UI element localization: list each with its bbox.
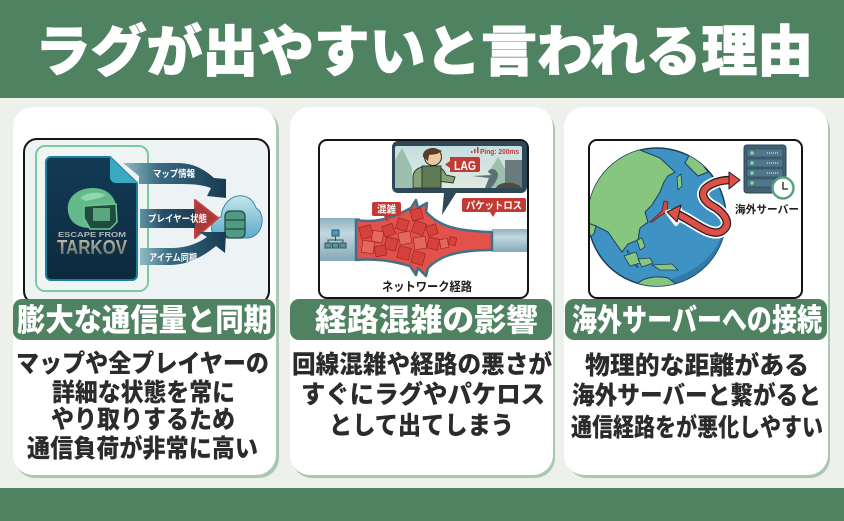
ping readout: Ping: 200ms [480,147,519,156]
tag: packet loss: パケットロス [466,200,522,212]
tag: congestion: 混雑 [377,203,396,216]
pipe left [320,218,360,261]
illustration: congested network pipe [290,140,552,440]
header band [0,0,844,98]
title: ラグが出やすいと言われる理由 [35,21,813,83]
arrow: player state [140,200,218,238]
icon: Japan [650,201,668,222]
icon: soldier [413,148,455,188]
illustration: game data flowing to cloud [24,139,269,304]
heading: route congestion: 経路混雑の影響 [315,303,538,338]
LAG tag: LAG [454,159,476,173]
enemy silhouette [472,169,498,188]
arrow: map info [123,163,226,198]
icon: network nodes [325,230,346,248]
arrow: map info: マップ情報 [153,168,195,180]
icon: game file: TARKOV [57,237,128,259]
text: overseas server description: 物理的な距離がある [585,351,809,380]
heading: large traffic and sync: 膨大な通信量と同期 [17,303,272,338]
tag: packet loss [462,198,526,217]
caption: network route: ネットワーク経路 [382,279,472,294]
arrow: route to overseas server [667,170,742,233]
globe [585,148,730,292]
panel: overseas server connection [564,107,830,478]
congested red bulge [356,200,492,276]
tag: congestion [372,202,401,222]
footer band [0,488,844,521]
prone silhouette [496,183,521,188]
text: route congestion description [292,350,552,440]
text: large traffic description: 詳細な状態を常に [52,379,235,407]
pipe right [492,229,527,252]
icon: game file: ESCAPE FROM [58,232,126,239]
icon: server with clock [744,145,794,198]
text: route congestion description: 回線混雑や経路の悪さが [292,350,552,379]
speech bubble: game scene [372,141,527,294]
text: overseas server description [571,351,823,442]
text: large traffic description: やり取りするため [51,406,235,434]
text: route congestion description: として出てしまう [329,412,514,440]
arrow: item sync: アイテム同期 [149,252,197,264]
text: overseas server description: 海外サーバーと繋がると [572,381,821,410]
text: large traffic description: マップや全プレイヤーの [16,350,269,378]
text: large traffic description [16,350,269,463]
icon: cloud database [212,196,262,238]
text: route congestion description: すぐにラグやパケロス [301,380,545,409]
panel: route congestion [290,107,830,478]
text: large traffic description: 通信負荷が非常に高い [27,434,258,463]
caption: overseas server: 海外サーバー [735,202,799,216]
panel: large traffic and sync [13,107,279,478]
arrow: item sync [140,232,226,265]
LAG tag [445,157,480,173]
icon: game file [46,157,137,280]
arrow: player state: プレイヤー状態 [148,213,207,225]
illustration: globe and overseas server [585,140,802,298]
